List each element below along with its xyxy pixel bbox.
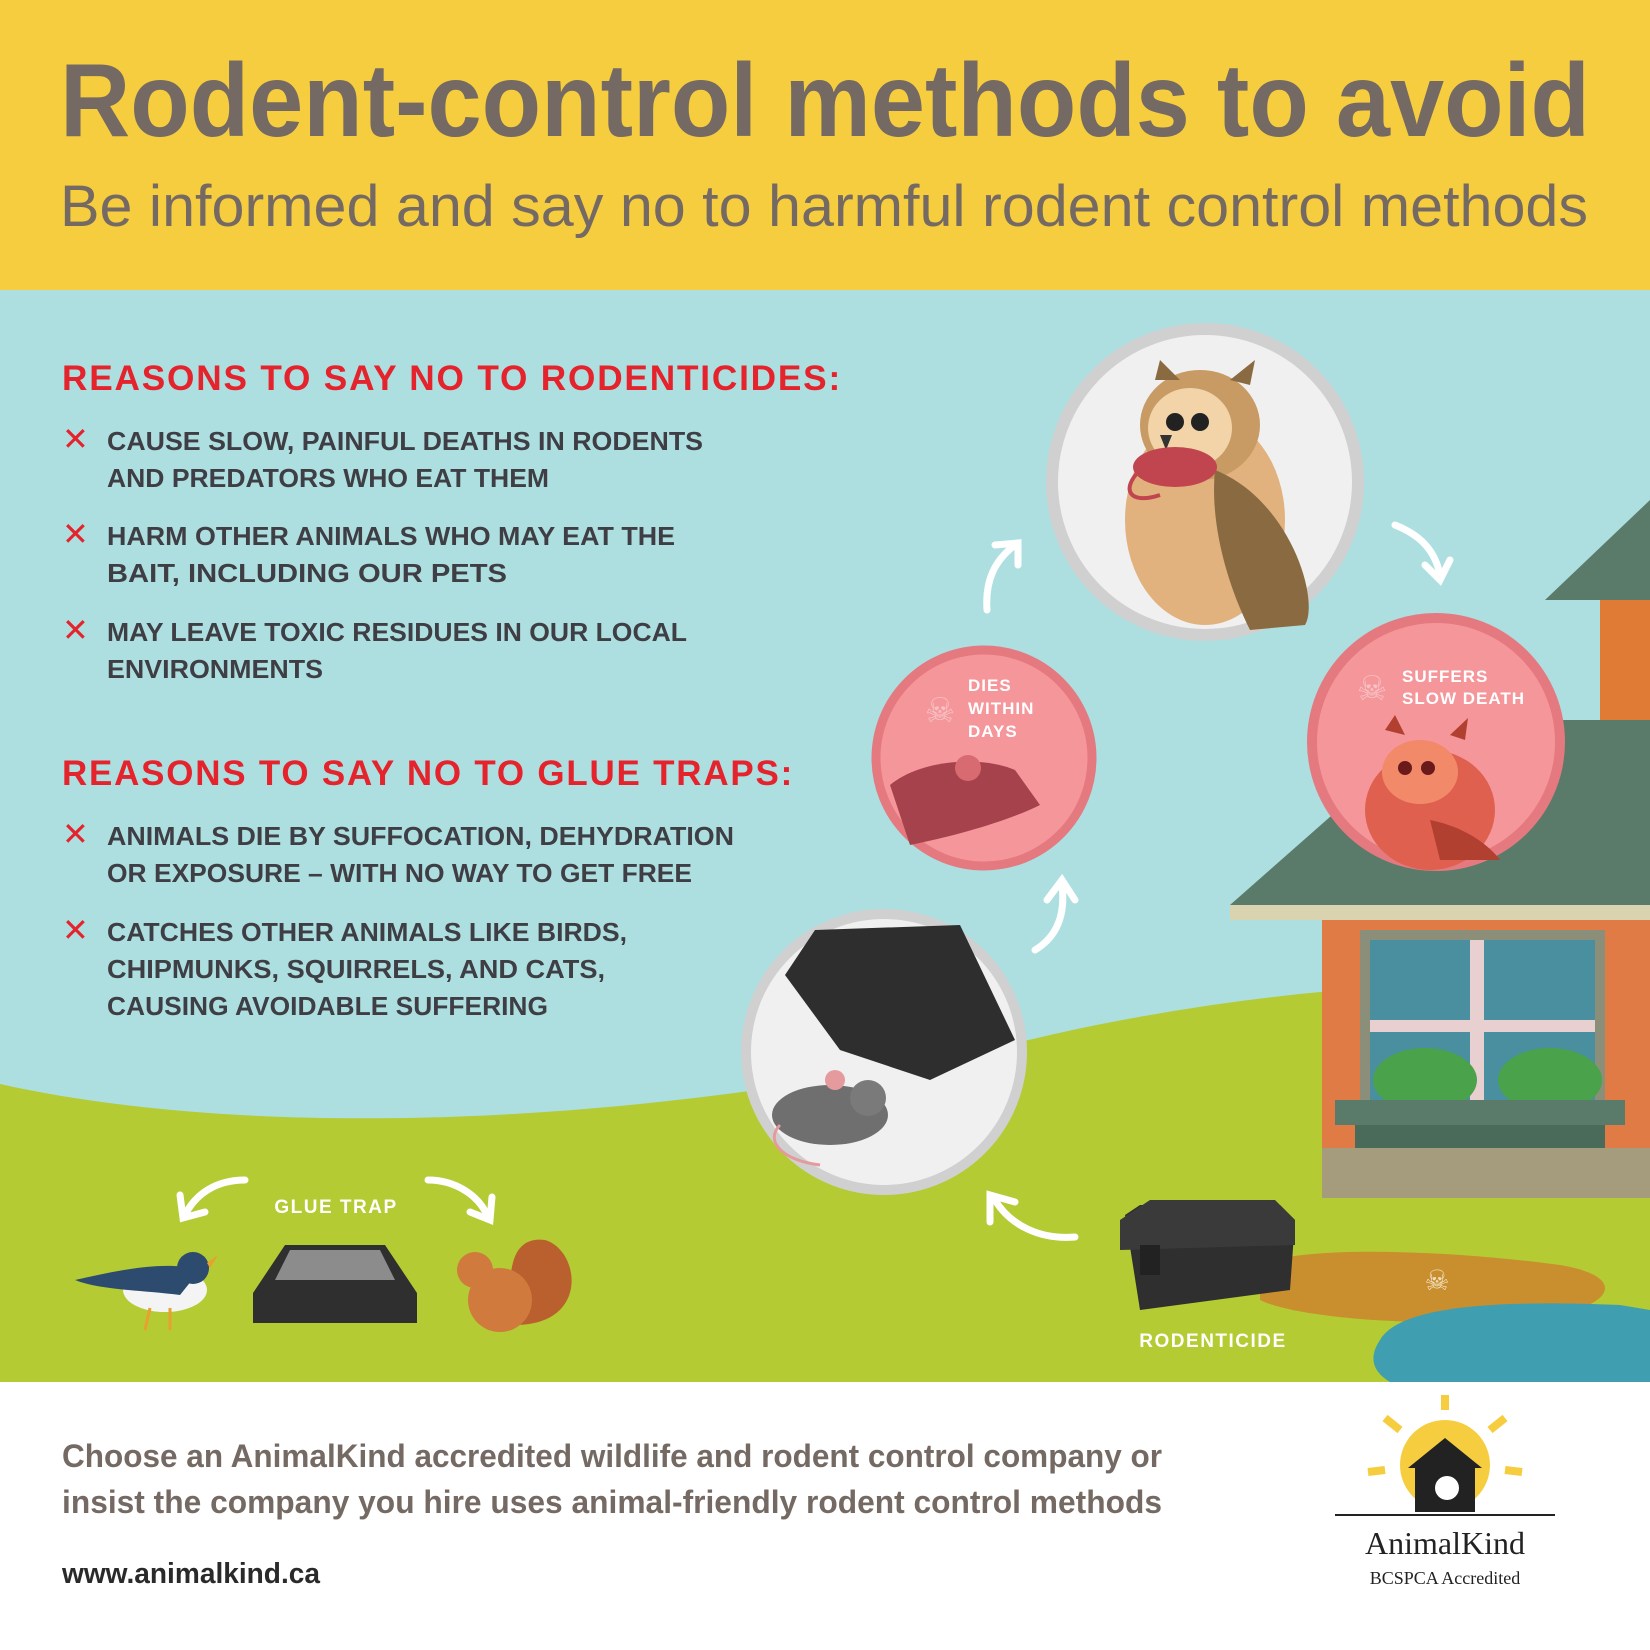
panel: rodenticide reasons: BAIT, INCLUDING OUR PETS	[107, 558, 507, 588]
circle: suffers slow death: SLOW DEATH	[1402, 689, 1525, 708]
green hill	[0, 982, 1650, 1382]
panel: glue trap reasons: ✕	[62, 912, 89, 948]
panel: glue trap reasons: CATCHES OTHER ANIMALS LIKE BIRDS,	[107, 917, 627, 947]
panel: glue trap reasons	[62, 754, 794, 1021]
panel: rodenticide reasons: ✕	[62, 612, 89, 648]
glue trap section	[75, 1197, 572, 1332]
panel: rodenticide reasons: REASONS TO SAY NO TO RODENTICIDES:	[62, 359, 842, 398]
panel: rodenticide reasons: ✕	[62, 421, 89, 457]
circle: rat near bait box	[746, 914, 1022, 1190]
header band	[0, 0, 1650, 290]
circle: dies within days: WITHIN	[968, 699, 1034, 718]
rodenticide box	[1120, 1200, 1295, 1352]
poison puddle	[1260, 1252, 1650, 1382]
glue trap board	[253, 1245, 417, 1323]
circle: dies within days: ☠	[925, 692, 955, 730]
panel: rodenticide reasons: MAY LEAVE TOXIC RESIDUES IN OUR LOCAL	[107, 617, 687, 647]
logo: BCSPCA Accredited	[1370, 1568, 1520, 1588]
circle: owl eating rat	[1052, 329, 1358, 635]
arrows	[180, 525, 1450, 1237]
footer: insist the company you hire uses animal-friendly rodent control methods	[62, 1484, 1162, 1520]
circle: suffers slow death: SUFFERS	[1402, 667, 1488, 686]
circle: suffers slow death	[1312, 618, 1560, 870]
sky background	[0, 290, 1650, 1382]
title: Rodent-control methods to avoid	[60, 43, 1590, 159]
url: www.animalkind.ca	[61, 1558, 321, 1590]
panel: glue trap reasons: CHIPMUNKS, SQUIRRELS, AND CATS,	[107, 954, 605, 984]
circle: dies within days: DAYS	[968, 722, 1018, 741]
footer	[0, 1382, 1650, 1650]
panel: glue trap reasons: ✕	[62, 816, 89, 852]
house	[1230, 500, 1650, 1198]
panel: glue trap reasons: OR EXPOSURE – WITH NO WAY TO GET FREE	[107, 858, 692, 888]
panel: glue trap reasons: ANIMALS DIE BY SUFFOCATION, DEHYDRATION	[107, 821, 734, 851]
poison puddle: ☠	[1424, 1265, 1450, 1296]
panel: glue trap reasons: REASONS TO SAY NO TO GLUE TRAPS:	[62, 754, 794, 793]
circle: suffers slow death: ☠	[1357, 670, 1387, 708]
squirrel	[457, 1240, 572, 1332]
label rodenticide: RODENTICIDE	[1139, 1331, 1287, 1352]
panel: rodenticide reasons: ✕	[62, 516, 89, 552]
panel: rodenticide reasons	[62, 359, 842, 684]
circle: dies within days: DIES	[968, 676, 1012, 695]
panel: glue trap reasons: CAUSING AVOIDABLE SUFFERING	[107, 991, 548, 1021]
panel: rodenticide reasons: ENVIRONMENTS	[107, 654, 323, 684]
circle: dies within days	[876, 650, 1092, 866]
bird	[75, 1252, 218, 1330]
label glue trap: GLUE TRAP	[274, 1197, 398, 1218]
subtitle: Be informed and say no to harmful rodent control methods	[60, 174, 1588, 239]
panel: rodenticide reasons: AND PREDATORS WHO EAT THEM	[107, 463, 549, 493]
panel: rodenticide reasons: HARM OTHER ANIMALS WHO MAY EAT THE	[107, 521, 675, 551]
panel: rodenticide reasons: CAUSE SLOW, PAINFUL DEATHS IN RODENTS	[107, 426, 703, 456]
logo	[1335, 1395, 1555, 1588]
logo: AnimalKind	[1365, 1525, 1525, 1561]
footer text: Choose an AnimalKind accredited wildlife and rodent control company or	[62, 1438, 1162, 1474]
